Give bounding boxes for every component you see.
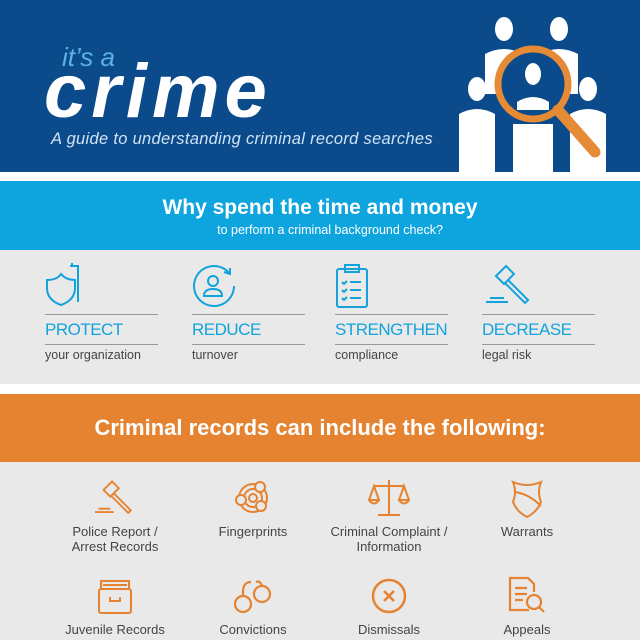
icon: badge bbox=[511, 480, 543, 518]
cyan banner bbox=[0, 181, 640, 250]
item: appeals: Appeals bbox=[504, 622, 550, 637]
icon: gavel bbox=[486, 264, 530, 304]
item: juvenile records bbox=[65, 580, 165, 637]
column: decrease bbox=[482, 264, 595, 362]
text: your organization: your organization bbox=[45, 348, 141, 362]
banner subheading: to perform a criminal background check? bbox=[217, 223, 443, 237]
header panel bbox=[0, 0, 640, 172]
icon: gavel orange bbox=[95, 480, 132, 514]
icon: scales bbox=[368, 480, 410, 516]
item: warrants bbox=[501, 480, 553, 539]
heading: PROTECT: PROTECT bbox=[45, 320, 123, 339]
item: appeals bbox=[504, 576, 550, 637]
item: warrants: Warrants bbox=[501, 524, 553, 539]
item: police report: Arrest Records bbox=[72, 539, 158, 554]
heading: STRENGTHEN: STRENGTHEN bbox=[335, 320, 447, 339]
item: criminal complaint: Information bbox=[356, 539, 422, 554]
orange banner bbox=[0, 394, 640, 462]
item: fingerprints: Fingerprints bbox=[219, 524, 287, 539]
text: legal risk: legal risk bbox=[482, 348, 531, 362]
item: police report: Police Report / bbox=[72, 524, 158, 539]
icon: document search bbox=[508, 576, 545, 613]
icon: file box bbox=[98, 580, 132, 614]
white gap 2 bbox=[0, 384, 640, 394]
title: crime: crime bbox=[44, 49, 272, 134]
icon: circle x bbox=[372, 578, 406, 614]
text: compliance: compliance bbox=[335, 348, 398, 362]
icon: shield building bbox=[46, 263, 79, 306]
text: turnover: turnover bbox=[192, 348, 238, 362]
subtitle: A guide to understanding criminal record searches bbox=[51, 130, 433, 148]
item: criminal complaint bbox=[330, 480, 448, 554]
item: dismissals bbox=[358, 578, 420, 637]
item: fingerprints bbox=[219, 481, 287, 539]
orange banner: Criminal records can include the following: bbox=[94, 415, 546, 440]
column: protect bbox=[45, 263, 158, 362]
column: reduce bbox=[192, 265, 305, 362]
heading: DECREASE: DECREASE bbox=[482, 320, 572, 339]
item: criminal complaint: Criminal Complaint / bbox=[330, 524, 448, 539]
item: convictions bbox=[219, 580, 287, 637]
icon: fingerprints bbox=[235, 481, 268, 513]
item: juvenile records: Juvenile Records bbox=[65, 622, 165, 637]
icon: people with magnifier bbox=[459, 17, 606, 172]
item: police report bbox=[72, 480, 158, 554]
title: it's a: it’s a bbox=[62, 42, 115, 72]
banner heading: Why spend the time and money bbox=[162, 196, 478, 219]
white gap bbox=[0, 172, 640, 181]
column: strengthen bbox=[335, 264, 448, 362]
heading: REDUCE: REDUCE bbox=[192, 320, 261, 339]
item: convictions: Convictions bbox=[219, 622, 287, 637]
icon: clipboard bbox=[336, 264, 368, 308]
item: dismissals: Dismissals bbox=[358, 622, 420, 637]
icon: person cycle bbox=[193, 265, 235, 307]
icon: handcuffs bbox=[234, 580, 272, 614]
